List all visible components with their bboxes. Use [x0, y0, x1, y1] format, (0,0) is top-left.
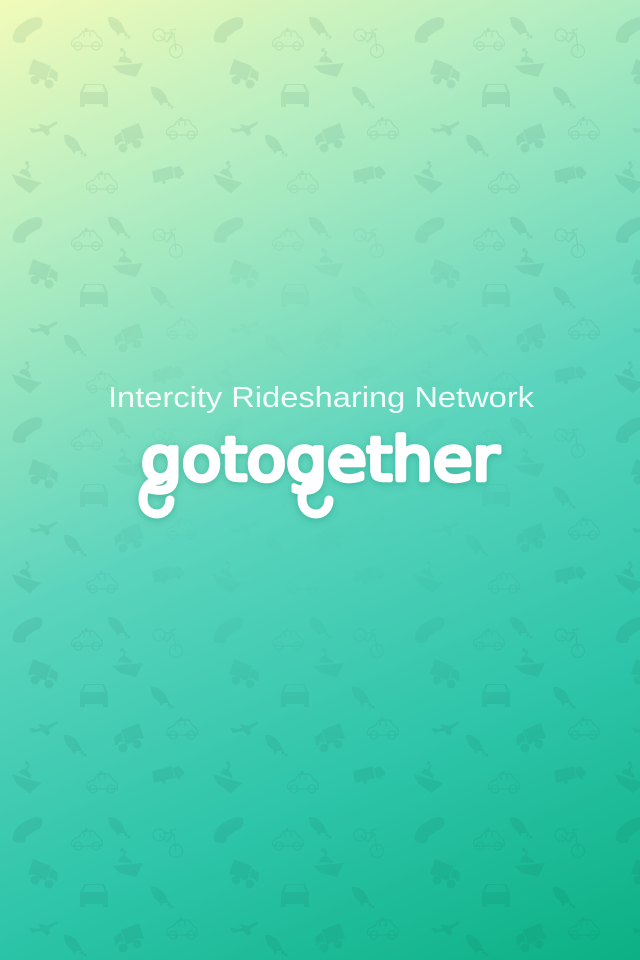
tagline: Intercity Ridesharing Network [108, 382, 535, 414]
logo wordmark: gotogether [141, 425, 499, 495]
logo descender loops [143, 480, 329, 514]
